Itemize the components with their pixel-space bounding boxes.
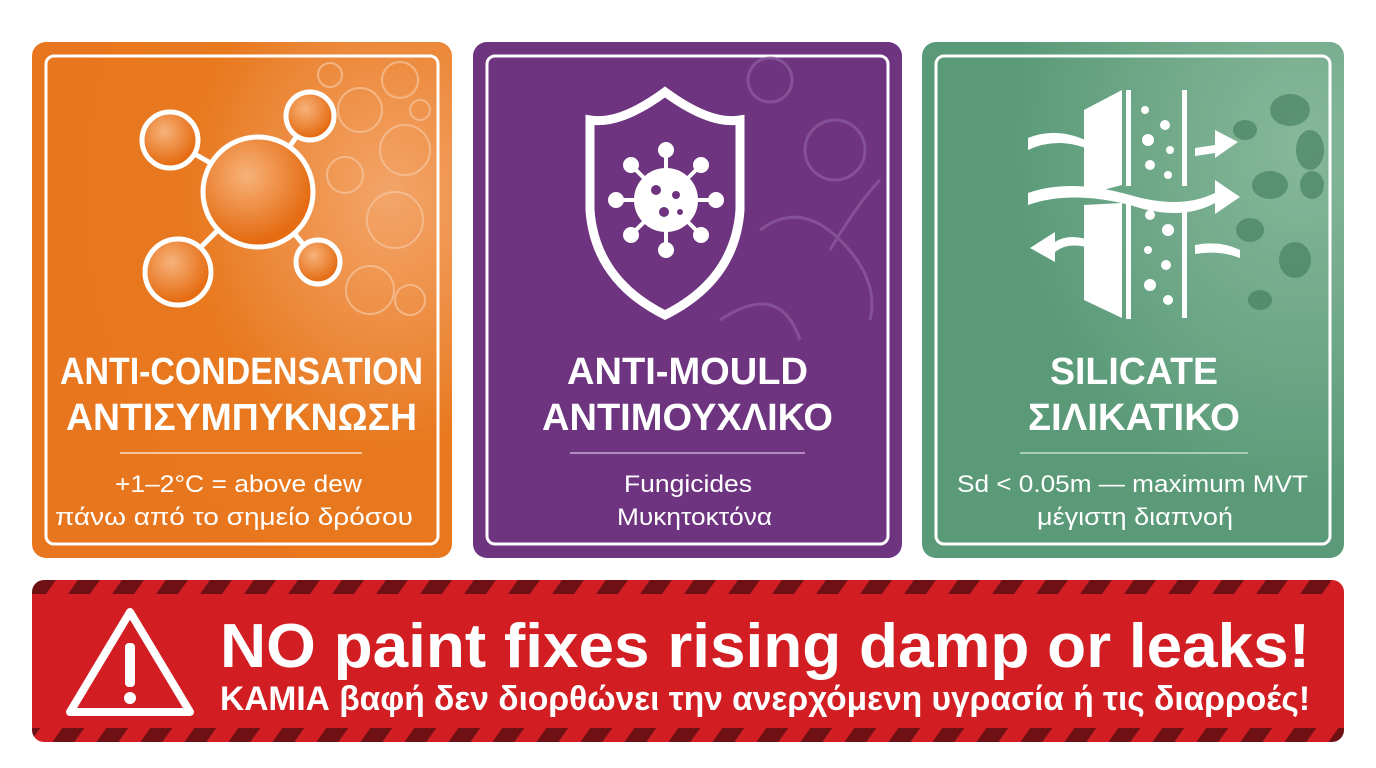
panel: silicate — [922, 42, 1344, 558]
panel: anti-condensation — [32, 42, 452, 558]
icon: molecule — [142, 92, 340, 305]
text: fungicides — [617, 471, 772, 531]
heading: anti-condensation: ANTI-CONDENSATION — [60, 351, 423, 393]
heading: anti-mould — [542, 351, 833, 439]
icon: breathable wall — [1028, 90, 1240, 319]
text: dew point — [55, 471, 413, 531]
text: sd value: μέγιστη διαπνοή — [1037, 504, 1233, 531]
heading: silicate — [1028, 351, 1240, 439]
text: sd value — [957, 471, 1308, 531]
text: fungicides: Μυκητοκτόνα — [617, 504, 772, 531]
heading: anti-condensation — [60, 351, 423, 439]
heading: anti-mould: ANTI-MOULD — [567, 351, 808, 393]
text: fungicides: Fungicides — [624, 471, 752, 498]
heading: silicate: ΣΙΛΙΚΑΤΙΚΟ — [1028, 397, 1240, 439]
icon: warning triangle — [70, 612, 190, 712]
banner: warning — [32, 580, 1344, 742]
heading: warning text: NO paint fixes rising damp or leaks! — [220, 612, 1310, 681]
heading: silicate: SILICATE — [1050, 351, 1218, 393]
icon: shield with virus — [590, 92, 740, 315]
heading: warning text — [220, 612, 1310, 718]
text: dew point: πάνω από το σημείο δρόσου — [55, 504, 413, 531]
panel: anti-mould — [473, 42, 902, 558]
heading: anti-mould: ΑΝΤΙΜΟΥΧΛΙΚΟ — [542, 397, 833, 439]
heading: anti-condensation: ΑΝΤΙΣΥΜΠΥΚΝΩΣΗ — [66, 397, 417, 439]
heading: warning text: ΚΑΜΙΑ βαφή δεν διορθώνει την ανερχόμενη υγρασία ή τις διαρροές! — [220, 680, 1310, 718]
text: dew point: +1–2°C = above dew — [115, 471, 363, 498]
text: sd value: Sd < 0.05m — maximum MVT — [957, 471, 1308, 498]
